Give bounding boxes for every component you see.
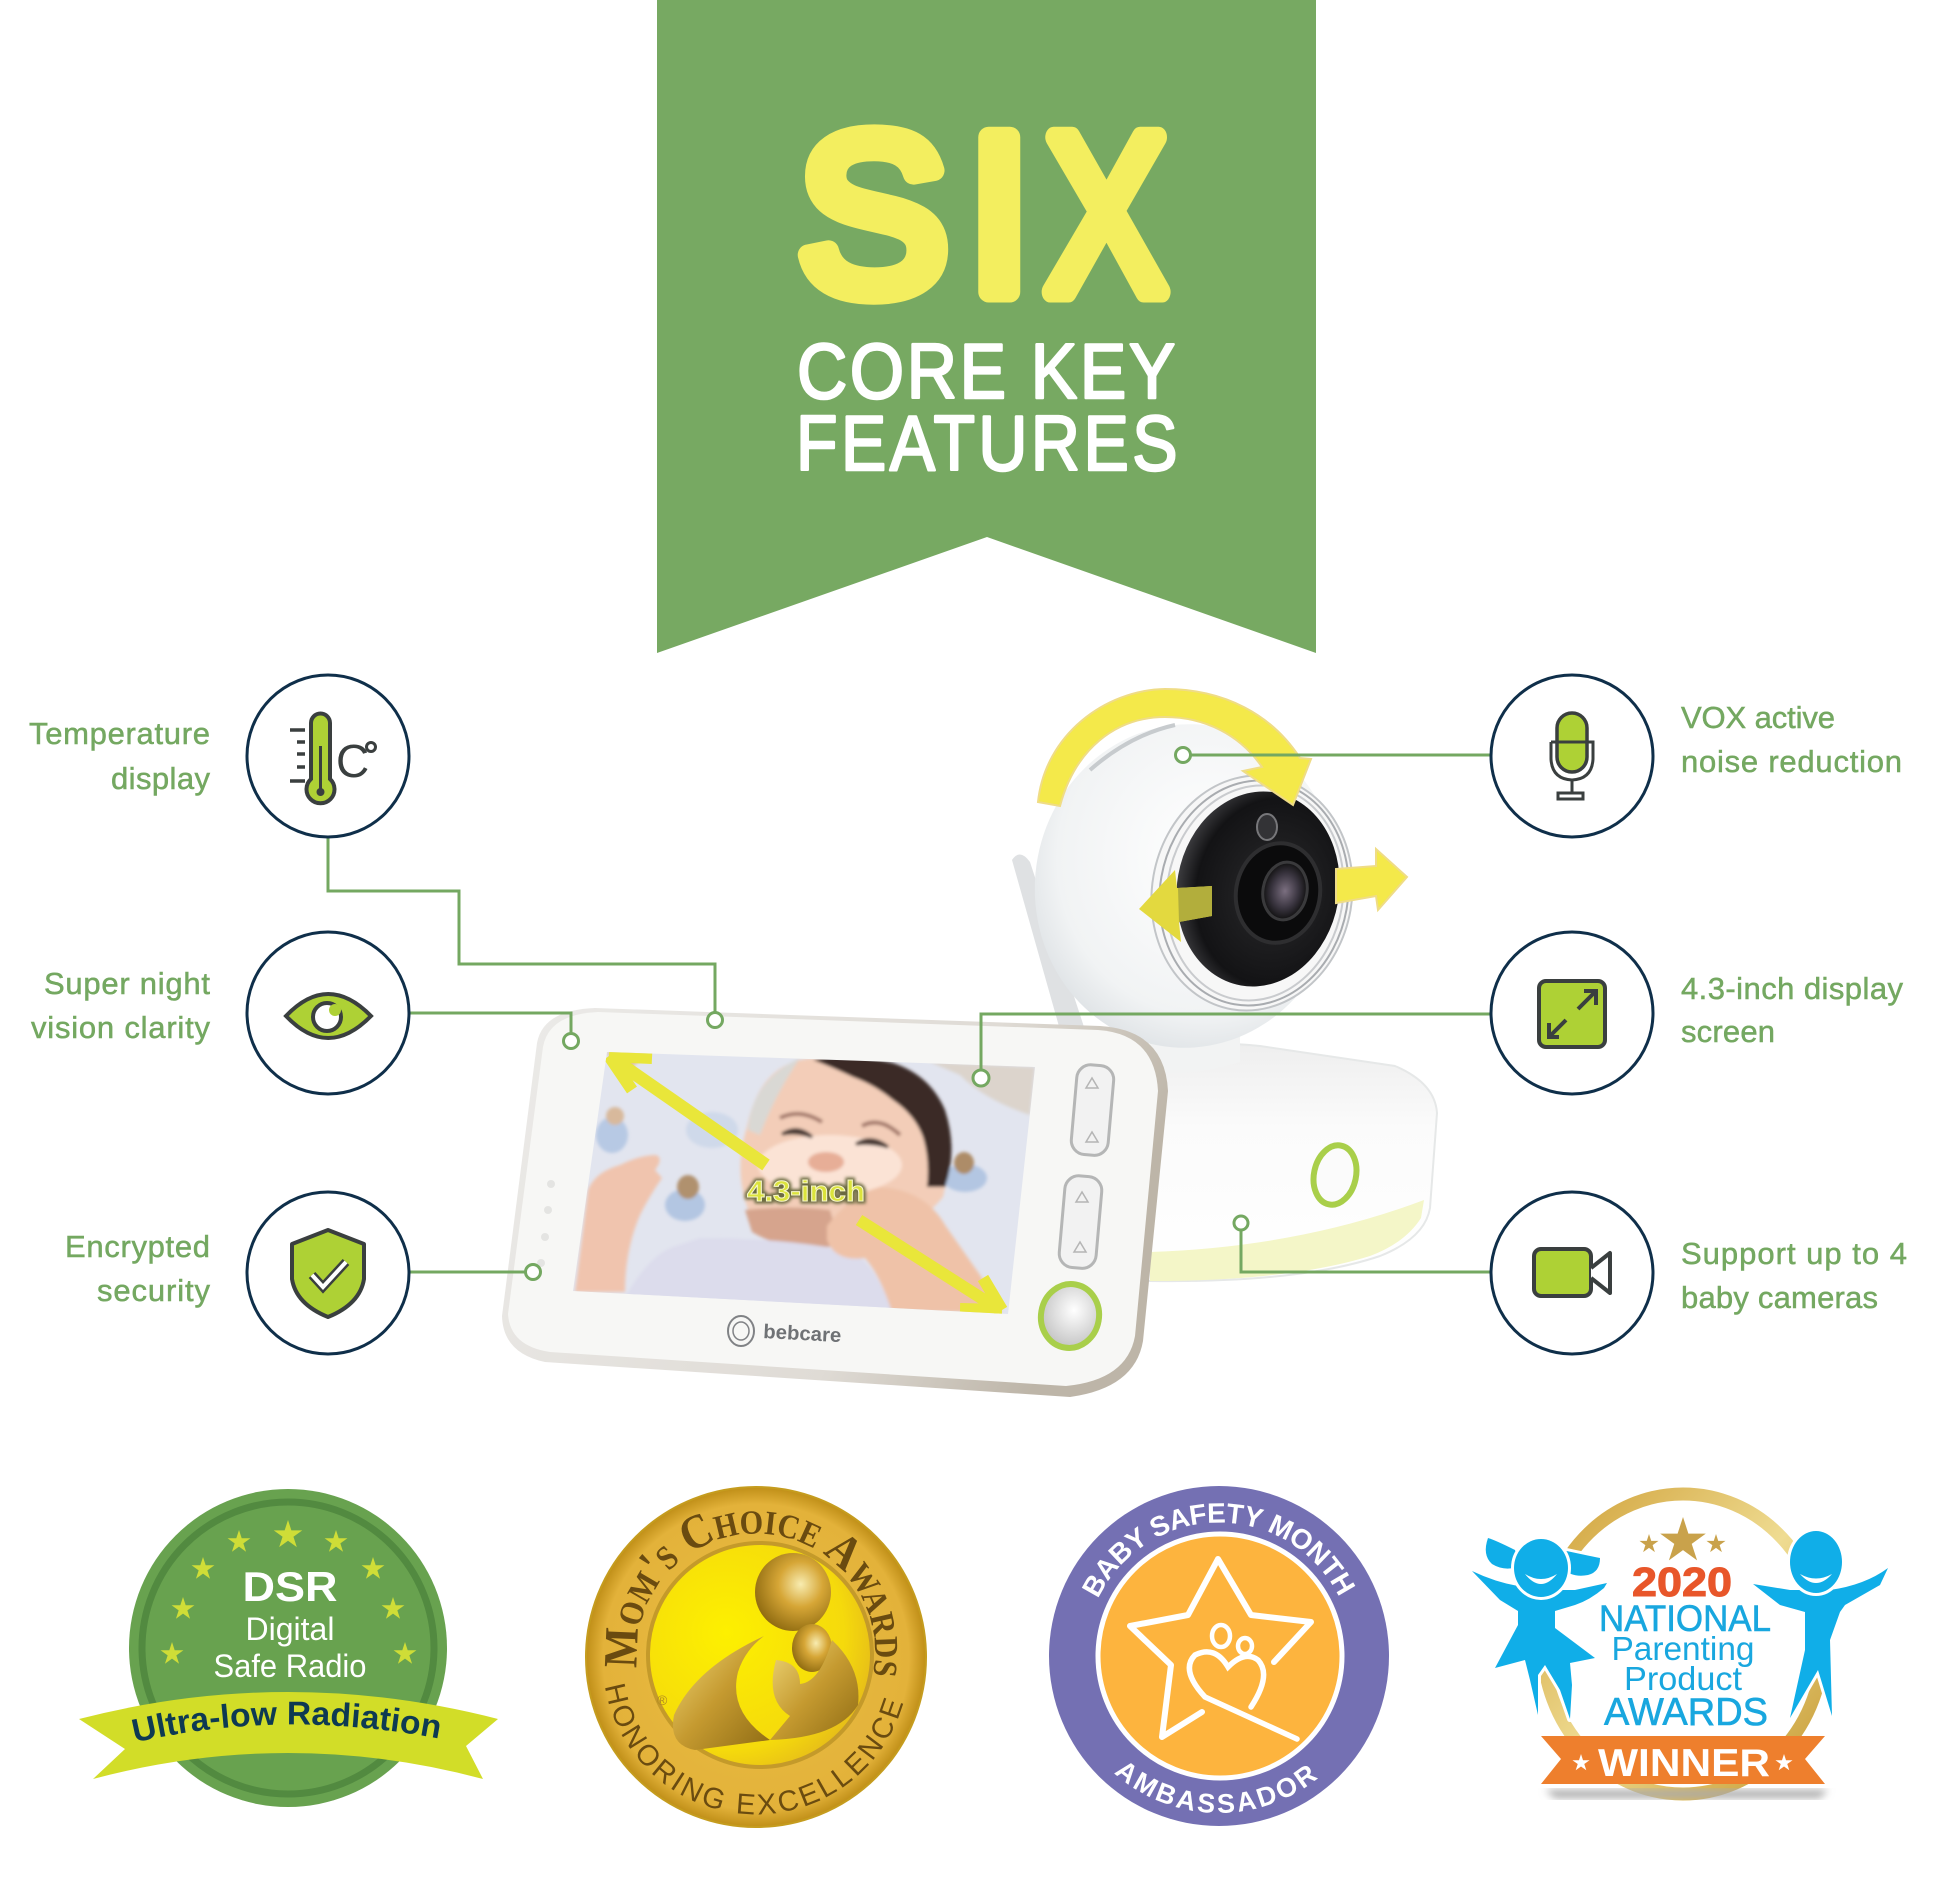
connector lines	[328, 748, 1491, 1280]
baby head	[792, 1624, 832, 1672]
screen label 4.3-inch: 4.3-inch	[747, 1176, 865, 1208]
arm and hand at mouth	[827, 1187, 1002, 1312]
orange banner	[1541, 1736, 1825, 1784]
label: Encrypted	[65, 1229, 210, 1264]
gold loop	[1543, 1494, 1823, 1794]
figure: boy	[1753, 1531, 1888, 1718]
feature: cameras	[1491, 1192, 1907, 1354]
sensor	[1257, 814, 1277, 840]
label: Super night	[44, 966, 210, 1001]
heart ribbon	[1189, 1652, 1297, 1739]
lens barrel	[1228, 836, 1328, 950]
Parenting: Parenting	[1612, 1630, 1754, 1667]
label: display	[111, 761, 210, 796]
outer gold disc	[586, 1487, 926, 1827]
base green ring	[1308, 1141, 1362, 1209]
banner heading	[657, 0, 1316, 653]
up/down button	[1070, 1064, 1115, 1156]
label: VOX active	[1681, 700, 1835, 735]
line: encrypted	[410, 1270, 525, 1274]
lens glass	[1258, 859, 1312, 923]
badge: DSR	[79, 1489, 498, 1807]
label: 4.3-inch display	[1681, 971, 1904, 1006]
dot: night vision	[564, 1034, 578, 1048]
banner shadow	[1545, 1790, 1828, 1798]
circle	[1491, 932, 1653, 1094]
label: noise reduction	[1681, 744, 1902, 779]
stars	[1639, 1517, 1726, 1560]
badge: Baby Safety Month	[1049, 1486, 1389, 1826]
label	[1681, 700, 1902, 779]
label: vision clarity	[31, 1010, 210, 1045]
right arrow	[1336, 849, 1407, 910]
feature: VOX	[1491, 675, 1902, 837]
hair	[813, 1057, 952, 1187]
subtitle line 2: FEATURES	[796, 399, 1181, 487]
left hand	[575, 1155, 662, 1292]
onesie	[630, 1238, 888, 1308]
line: VOX	[1191, 754, 1491, 756]
left/right button	[1058, 1175, 1103, 1269]
circle	[247, 1192, 409, 1354]
title: SIX: S	[798, 88, 948, 340]
label: Support up to 4	[1681, 1236, 1907, 1271]
disc	[129, 1489, 447, 1807]
stars	[161, 1520, 416, 1664]
dot: display	[973, 1070, 989, 1086]
label: screen	[1681, 1014, 1775, 1049]
2020: 2020	[1632, 1559, 1732, 1605]
figure: girl	[1472, 1538, 1607, 1719]
monitor face	[508, 1012, 1158, 1386]
registered mark: ®	[657, 1692, 668, 1708]
title: SIX: X	[1046, 88, 1166, 340]
label	[31, 966, 210, 1045]
ribbon text: Ultra-low Radiation	[132, 1702, 440, 1741]
line: night vision	[410, 1013, 571, 1032]
rotation arrow	[1038, 689, 1311, 806]
purple disc	[1049, 1486, 1389, 1826]
badge: National Parenting Product Awards	[1472, 1494, 1888, 1798]
arrow up-left	[609, 1056, 766, 1165]
nose	[808, 1152, 844, 1172]
lower arc text: HONORING EXCELLENCE	[605, 1684, 904, 1815]
label	[1681, 1236, 1907, 1315]
label: Temperature	[29, 716, 210, 751]
WINNER: WINNER	[1598, 1742, 1770, 1785]
base yellow band	[1150, 1200, 1424, 1281]
top highlight	[1090, 725, 1175, 770]
ribbon	[79, 1692, 498, 1779]
status LEDs	[537, 1180, 555, 1267]
title: SIX: I	[968, 88, 1031, 340]
NATIONAL: NATIONAL	[1599, 1598, 1771, 1639]
mother head	[755, 1553, 831, 1631]
heart swoosh	[770, 1640, 858, 1740]
label	[65, 1229, 210, 1308]
icon: thermometer: C	[336, 735, 369, 787]
pillow bears	[596, 1117, 628, 1153]
Digital text: Digital	[246, 1611, 334, 1647]
dot: temperature	[708, 1012, 722, 1028]
mother body	[673, 1636, 770, 1750]
orange disc	[1098, 1534, 1342, 1778]
logo: bebcare: bebcare	[763, 1321, 842, 1347]
line: display	[981, 1014, 1491, 1070]
left arrow	[1139, 870, 1212, 942]
label	[1681, 971, 1904, 1049]
icon: video camera	[1534, 1249, 1610, 1296]
upper arc text: BABY SAFETY MONTH	[1082, 1503, 1356, 1598]
inner ring	[142, 1502, 434, 1794]
dot: encrypted	[526, 1264, 540, 1280]
icon: expand	[1539, 981, 1605, 1047]
label: security	[97, 1273, 210, 1308]
icon: microphone	[1551, 713, 1593, 799]
logo: bebcare	[728, 1316, 842, 1347]
icon: shield	[292, 1230, 364, 1317]
upper arc text: Mom's Choice Awards	[604, 1511, 898, 1676]
icon: thermometer	[290, 714, 376, 803]
camera unit	[1012, 689, 1437, 1281]
eyes	[782, 1130, 812, 1137]
banner stars	[1572, 1754, 1793, 1770]
cheeks	[758, 1135, 902, 1195]
Product: Product	[1624, 1660, 1742, 1697]
base drum	[1130, 1044, 1437, 1281]
neck	[1150, 1030, 1240, 1073]
circle	[247, 675, 409, 837]
figure heads	[1212, 1625, 1252, 1654]
subtitle line 1: CORE KEY	[797, 327, 1178, 415]
circle	[1491, 675, 1653, 837]
photo: baby	[573, 1052, 1035, 1314]
feature: night vision	[31, 932, 409, 1094]
line: cameras	[1241, 1231, 1491, 1272]
banner shape	[657, 0, 1316, 653]
inner yellow disc	[648, 1543, 872, 1767]
monitor	[502, 1008, 1168, 1397]
chin shadow	[745, 1208, 840, 1248]
star outline	[1130, 1559, 1311, 1737]
feature: display	[1491, 932, 1904, 1094]
circle	[1491, 1192, 1653, 1354]
feature: temperature	[29, 675, 409, 837]
screen label 4.3-inch: 4.3-inch	[747, 1176, 865, 1208]
Safe Radio text: Safe Radio	[214, 1648, 366, 1684]
arrow down-right	[859, 1220, 1002, 1310]
label	[29, 716, 210, 796]
antenna	[1012, 854, 1085, 1030]
badge: Mom's Choice	[585, 1486, 927, 1828]
left arrow shaded part	[1178, 886, 1212, 922]
AWARDS: AWARDS	[1604, 1691, 1768, 1734]
lens ring	[1133, 759, 1371, 1027]
power button	[1036, 1279, 1104, 1353]
monitor shell	[502, 1008, 1168, 1397]
label: baby cameras	[1681, 1280, 1878, 1315]
icon: eye	[286, 994, 371, 1038]
line: temperature	[328, 837, 715, 1012]
dot: VOX	[1176, 748, 1190, 762]
lower arc text: AMBASSADOR	[1114, 1763, 1318, 1813]
circle	[247, 932, 409, 1094]
lens black face	[1161, 778, 1355, 1000]
DSR text: DSR	[242, 1563, 338, 1610]
camera head	[1014, 704, 1360, 1068]
head	[739, 1059, 946, 1219]
dot: cameras	[1234, 1216, 1248, 1230]
feature: encrypted	[65, 1192, 409, 1354]
